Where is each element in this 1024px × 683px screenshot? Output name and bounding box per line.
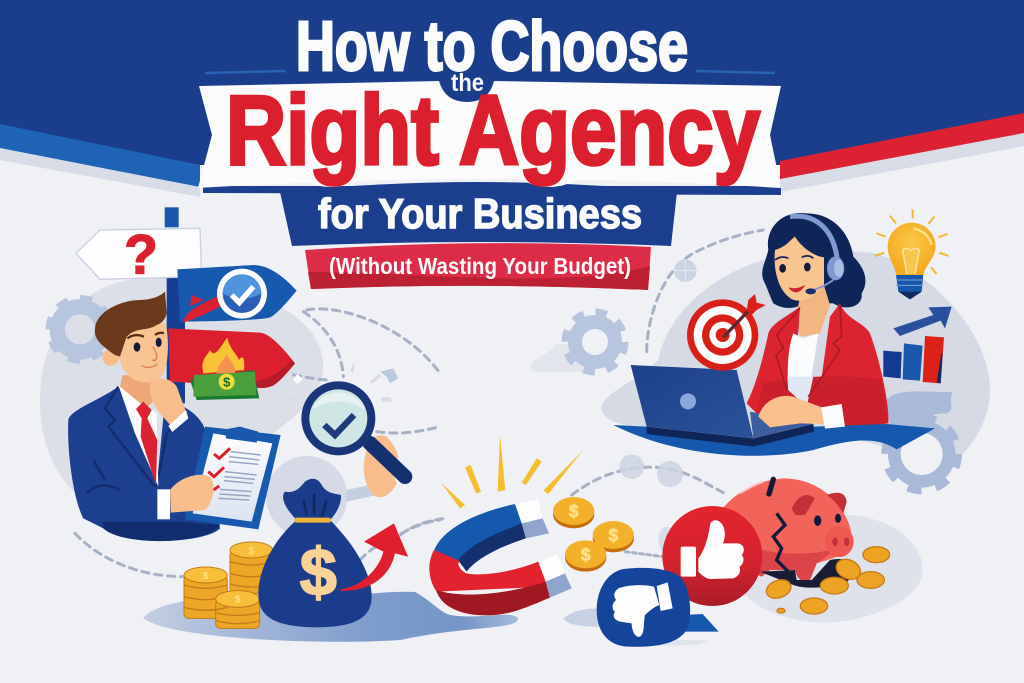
money bag: $ <box>300 536 337 610</box>
signpost pole <box>165 207 185 403</box>
lower hand <box>157 475 214 519</box>
blazer <box>747 303 889 428</box>
red growth arrow <box>340 523 408 591</box>
money: $ <box>223 375 231 390</box>
small globes <box>619 454 683 487</box>
ground shadow <box>143 592 518 642</box>
coins attracted <box>553 497 634 572</box>
laptop <box>631 365 814 447</box>
red ribbon <box>305 243 651 290</box>
blue sub-banner <box>280 182 677 246</box>
grey blob behind piggy <box>740 515 923 623</box>
snout <box>825 526 854 557</box>
crack <box>773 513 790 573</box>
target with dart <box>687 294 766 371</box>
heading: the: the <box>451 69 484 97</box>
flame <box>202 337 244 373</box>
heading: How to Choose: How to Choose <box>296 7 688 85</box>
coins attracted: $ <box>609 525 619 545</box>
slot <box>769 479 773 494</box>
dashed paths <box>400 467 728 557</box>
thumbs up badge <box>658 506 762 606</box>
checklist <box>208 448 261 500</box>
sign: check <box>177 265 297 323</box>
tie <box>136 402 157 485</box>
desk swoosh <box>613 424 935 456</box>
bar chart <box>883 336 944 383</box>
icon: gear <box>49 299 111 360</box>
dashed paths <box>75 309 440 577</box>
blue-grey smudge <box>887 391 953 427</box>
eyes <box>814 515 821 526</box>
title banner <box>198 81 781 290</box>
sign: question mark: ? <box>124 224 158 286</box>
man in suit <box>68 292 281 541</box>
sign: question mark <box>76 224 202 286</box>
grey blob behind woman <box>602 251 990 463</box>
hand on chin <box>150 378 187 427</box>
sign: burning money <box>168 328 295 400</box>
magnet <box>429 499 572 615</box>
white halos under descenders <box>301 157 751 187</box>
bulb rays <box>875 209 948 274</box>
small globe <box>674 259 697 282</box>
heading: for Your Business: for Your Business <box>318 190 642 237</box>
money bag <box>258 479 372 627</box>
thumbs down bubble <box>563 568 719 647</box>
lapels <box>776 305 842 397</box>
clipboard <box>185 427 281 529</box>
small gear and cloud, mid page <box>530 313 624 372</box>
check badge <box>217 269 267 319</box>
heading: Right Agency: Right Agency <box>226 75 760 185</box>
face <box>775 237 824 301</box>
magnifying glass <box>301 381 405 497</box>
shirt <box>118 385 158 487</box>
subheading: Without Wasting Your Budget: (Without Wasting Your Budget) <box>329 253 631 279</box>
scene: magnet, coins, piggy bank, thumbs <box>400 435 923 647</box>
spilled coins <box>764 547 890 614</box>
coin stacks: $ <box>203 571 209 582</box>
scene: woman at laptop <box>602 209 990 490</box>
light bulb <box>875 209 948 299</box>
grey circle behind money bag <box>266 456 377 537</box>
trend arrow <box>893 307 952 336</box>
white banner <box>198 81 781 188</box>
dark hole <box>760 559 860 588</box>
neck <box>120 375 160 408</box>
scattered fragments <box>287 362 398 402</box>
coins attracted: $ <box>569 501 579 521</box>
coin stacks: $ <box>249 546 255 557</box>
scene: left decision area, man, magnifier, money <box>40 207 440 628</box>
dashed paths <box>647 230 763 352</box>
coin stacks <box>184 542 273 628</box>
coins attracted: $ <box>581 544 591 564</box>
red arrow <box>183 295 220 323</box>
ears <box>792 495 815 515</box>
head <box>95 292 168 383</box>
header band <box>0 0 1024 197</box>
suit <box>68 387 220 541</box>
neck <box>797 283 830 337</box>
grey blob behind man <box>40 278 323 533</box>
shirt <box>788 333 818 407</box>
banner shadow strip <box>203 186 781 195</box>
coin stacks: $ <box>235 595 241 606</box>
broken piggy bank <box>722 478 890 614</box>
hair <box>762 213 865 308</box>
magnet rays <box>441 435 583 508</box>
icon: gear <box>886 418 958 490</box>
headset <box>790 216 844 294</box>
hand and cuff <box>758 396 845 429</box>
woman with headset <box>747 213 889 428</box>
